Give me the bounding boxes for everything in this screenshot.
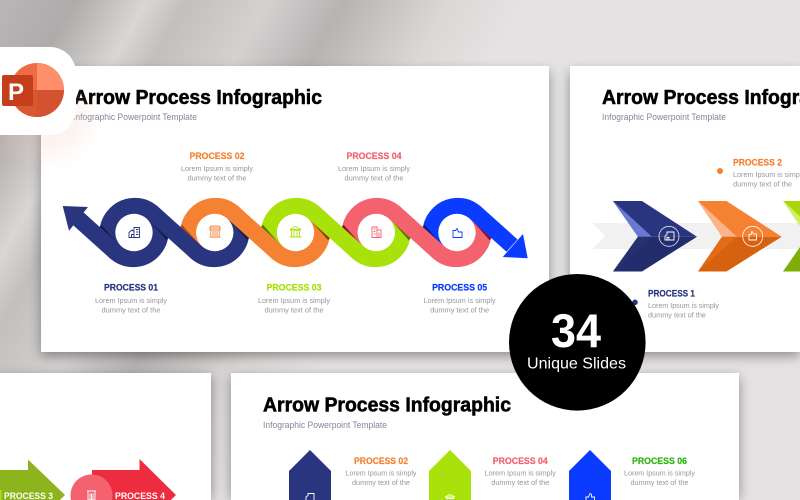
label: process 06 bbox=[624, 456, 695, 487]
label: process 2 bbox=[717, 158, 800, 189]
label: process 1: PROCESS 1 bbox=[648, 289, 695, 299]
icon: PowerPoint logo bbox=[0, 47, 76, 135]
label: process 05 bbox=[424, 283, 496, 314]
band: grey arrow track bbox=[593, 223, 800, 249]
panel: third slide bbox=[0, 373, 211, 500]
label: process 02: dummy text of the bbox=[352, 480, 410, 487]
label: process 04: dummy text of the bbox=[344, 176, 404, 183]
label: process 02: Lorem Ipsum is simply bbox=[181, 166, 254, 173]
subtitle: Infographic Powerpoint Template bbox=[602, 112, 726, 122]
label: process 04: dummy text of the bbox=[491, 480, 549, 487]
arrow: right head bbox=[474, 212, 528, 258]
label: process 04: Lorem Ipsum is simply bbox=[338, 166, 411, 173]
marker: lime bbox=[429, 450, 471, 500]
label: process 1: dummy text of the bbox=[648, 313, 706, 320]
label: process 02: Lorem Ipsum is simply bbox=[346, 470, 417, 477]
label: process 03 bbox=[258, 283, 331, 314]
icon: node 2 bbox=[196, 214, 233, 251]
arrow: process 4 bbox=[70, 459, 176, 500]
title: Arrow Process Infographic bbox=[74, 86, 322, 109]
icon: node 3 bbox=[277, 214, 314, 251]
label: process 02: PROCESS 02 bbox=[190, 151, 244, 161]
subtitle: Infographic Powerpoint Template bbox=[73, 112, 197, 122]
title: Arrow Process Infographic bbox=[263, 394, 511, 416]
badge: 34 unique slides: Unique Slides bbox=[527, 356, 626, 372]
label: process 2: PROCESS 2 bbox=[733, 158, 782, 168]
label: process 02 bbox=[346, 456, 417, 487]
icon: node 5 bbox=[438, 214, 476, 251]
label: process 02 bbox=[181, 151, 254, 183]
diagonal bands bbox=[152, 212, 440, 253]
label: process 05: Lorem Ipsum is simply bbox=[424, 298, 496, 305]
label: process 06: dummy text of the bbox=[630, 480, 689, 487]
label: process 03: PROCESS 03 bbox=[266, 283, 322, 293]
icon: node 1 bbox=[115, 214, 153, 251]
label: process 02: PROCESS 02 bbox=[354, 456, 408, 466]
marker: navy bbox=[289, 450, 331, 500]
subtitle: Infographic Powerpoint Template bbox=[263, 420, 387, 430]
label: process 04: PROCESS 04 bbox=[493, 456, 548, 466]
label: process 06: PROCESS 06 bbox=[632, 456, 687, 466]
chevron: orange bbox=[698, 201, 782, 272]
label: process 03: dummy text of the bbox=[264, 308, 324, 314]
label: process 05: dummy text of the bbox=[430, 308, 489, 314]
crease shadows bbox=[99, 221, 492, 244]
arrow: left head bbox=[63, 206, 116, 253]
chart: interwoven arrow ribbon bbox=[63, 206, 528, 259]
label: process 04 bbox=[485, 456, 556, 487]
label: process 01 bbox=[95, 283, 168, 314]
label: process 04: PROCESS 04 bbox=[346, 151, 402, 161]
label: process 03: Lorem Ipsum is simply bbox=[258, 298, 331, 305]
arrow: process 3 bbox=[0, 460, 65, 500]
badge: 34 unique slides bbox=[509, 274, 646, 411]
label: process 02: dummy text of the bbox=[188, 176, 247, 183]
label: process 04: Lorem Ipsum is simply bbox=[485, 470, 556, 477]
label: process 01: PROCESS 01 bbox=[104, 283, 158, 293]
marker: blue bbox=[569, 450, 611, 500]
label: process 04 bbox=[338, 151, 411, 183]
label: process 2: dummy text of the bbox=[733, 182, 792, 189]
logo glow bbox=[0, 86, 90, 158]
panel: second slide bbox=[570, 66, 800, 352]
label: process 1: Lorem Ipsum is simply bbox=[648, 303, 719, 310]
pie bbox=[10, 63, 64, 117]
chevron: navy bbox=[613, 201, 697, 272]
lower arcs bbox=[116, 212, 483, 259]
label: process 01: Lorem Ipsum is simply bbox=[95, 298, 168, 305]
icon: node 4 bbox=[358, 214, 395, 251]
panel: main slide bbox=[41, 66, 549, 352]
label: process 06: Lorem Ipsum is simply bbox=[624, 470, 695, 477]
badge: 34 unique slides: 34 bbox=[551, 304, 601, 357]
chevron: lime bbox=[783, 201, 800, 272]
panel: fourth slide bbox=[231, 373, 739, 500]
upper arcs bbox=[108, 206, 475, 253]
P tile: P bbox=[8, 79, 24, 106]
label: process 05: PROCESS 05 bbox=[432, 283, 487, 293]
label: process 1 bbox=[632, 289, 719, 320]
label: process 01: dummy text of the bbox=[102, 308, 161, 314]
